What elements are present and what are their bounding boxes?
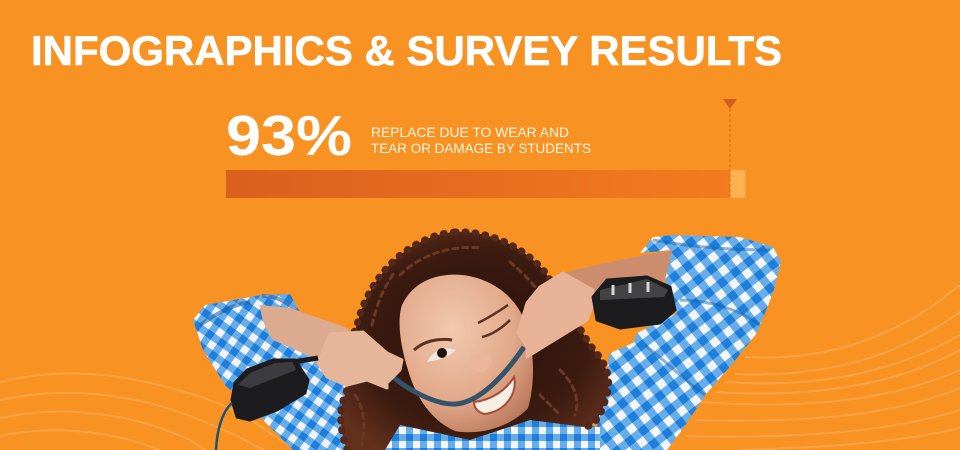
left headphone cup [232, 358, 318, 420]
wave pattern: bottom right [685, 285, 960, 450]
face [400, 275, 533, 432]
stat description: REPLACE DUE TO WEAR AND [371, 124, 569, 140]
title: INFOGRAPHICS & SURVEY RESULTS [31, 27, 782, 74]
left eye [414, 339, 456, 362]
right sleeve and shoulder [560, 235, 781, 450]
marker: triangle and dashed line [723, 99, 737, 198]
right fist [518, 273, 593, 357]
progress bar [226, 170, 746, 198]
left headphone cable [216, 403, 232, 450]
wave pattern: bottom left [0, 373, 300, 450]
headset cable across face [393, 347, 524, 404]
right headphone cup [593, 277, 675, 328]
winking right eye [478, 305, 510, 337]
photo: child with headphones [193, 232, 781, 450]
left fist [318, 332, 402, 388]
nose [469, 352, 491, 372]
stat description: TEAR OR DAMAGE BY STUDENTS [371, 140, 591, 156]
stat description [371, 124, 591, 156]
shirt collar and chest [383, 417, 600, 450]
stat: 93 percent: 93% [226, 104, 352, 168]
right arm [563, 250, 672, 300]
hair [341, 232, 609, 450]
smile [474, 377, 515, 414]
left arm [260, 305, 360, 365]
left sleeve and shoulder [193, 294, 350, 450]
